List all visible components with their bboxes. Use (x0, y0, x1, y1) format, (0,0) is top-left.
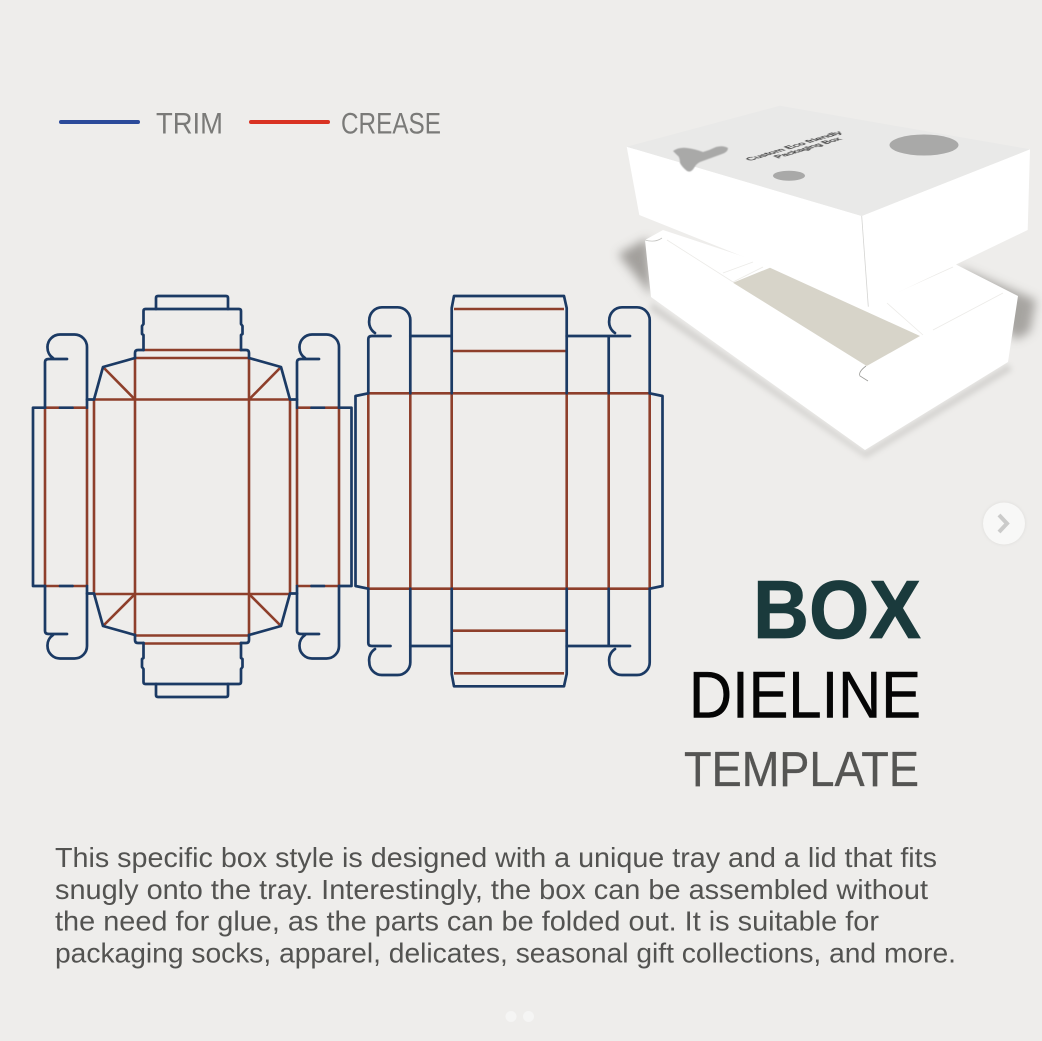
trim lines: tray (356, 296, 662, 686)
tray: outer faces (645, 230, 1018, 450)
lid: bird-shaped grey logo (673, 146, 728, 172)
legend: trim line sample (61, 120, 138, 124)
title: DIELINE: DIELINE (689, 658, 921, 732)
tray: corner notches (645, 238, 868, 381)
description text: the need for glue, as the parts can be folded out. It is suitable for (55, 906, 879, 936)
lid: printed caption: Custom Eco friendly (744, 130, 846, 162)
legend: crease label: CREASE (341, 107, 441, 140)
left flap and curls (33, 408, 45, 586)
carousel dots (506, 1011, 534, 1022)
lid: left face (627, 147, 868, 307)
lid: small grey ellipse (773, 171, 805, 181)
description text: This specific box style is designed with a unique tray and a lid that fits (55, 842, 937, 873)
legend: trim label: TRIM (156, 107, 223, 140)
diagram: tray dieline (right) (356, 296, 662, 686)
title block (684, 563, 921, 797)
legend (61, 107, 441, 140)
tray curl: bottom left (369, 589, 410, 675)
crease lines: tray (368, 309, 650, 673)
diagram: lid dieline (left) (33, 296, 352, 697)
top tabs (156, 296, 228, 309)
tray curl: top right (609, 307, 650, 393)
crease lines: lid (45, 350, 339, 644)
description text: snugly onto the tray. Interestingly, the box can be assembled without (55, 874, 928, 905)
trim lines: lid (33, 296, 352, 697)
tray: interior floor (733, 268, 920, 366)
title: BOX: BOX (753, 563, 921, 656)
legend: crease line sample (251, 120, 328, 124)
title: TEMPLATE: TEMPLATE (684, 743, 919, 797)
illustration: assembled 3D box (618, 106, 1036, 458)
lid: right face (862, 149, 1030, 307)
lid: printed caption: Packaging Box (772, 137, 845, 160)
lid: top face (627, 106, 1030, 216)
lid: corner edge (862, 216, 868, 307)
description text (55, 842, 956, 968)
bottom tabs (156, 684, 228, 697)
tray curl: bottom right (609, 589, 650, 675)
tray: fold details (667, 240, 1003, 335)
tray curl: top left (369, 307, 410, 393)
icon: next arrow button (982, 502, 1026, 546)
box shadows (618, 238, 1036, 458)
right flap and curls (339, 408, 352, 586)
lid: large grey ellipse (890, 134, 958, 156)
description text: packaging socks, apparel, delicates, seasonal gift collections, and more. (55, 938, 956, 968)
